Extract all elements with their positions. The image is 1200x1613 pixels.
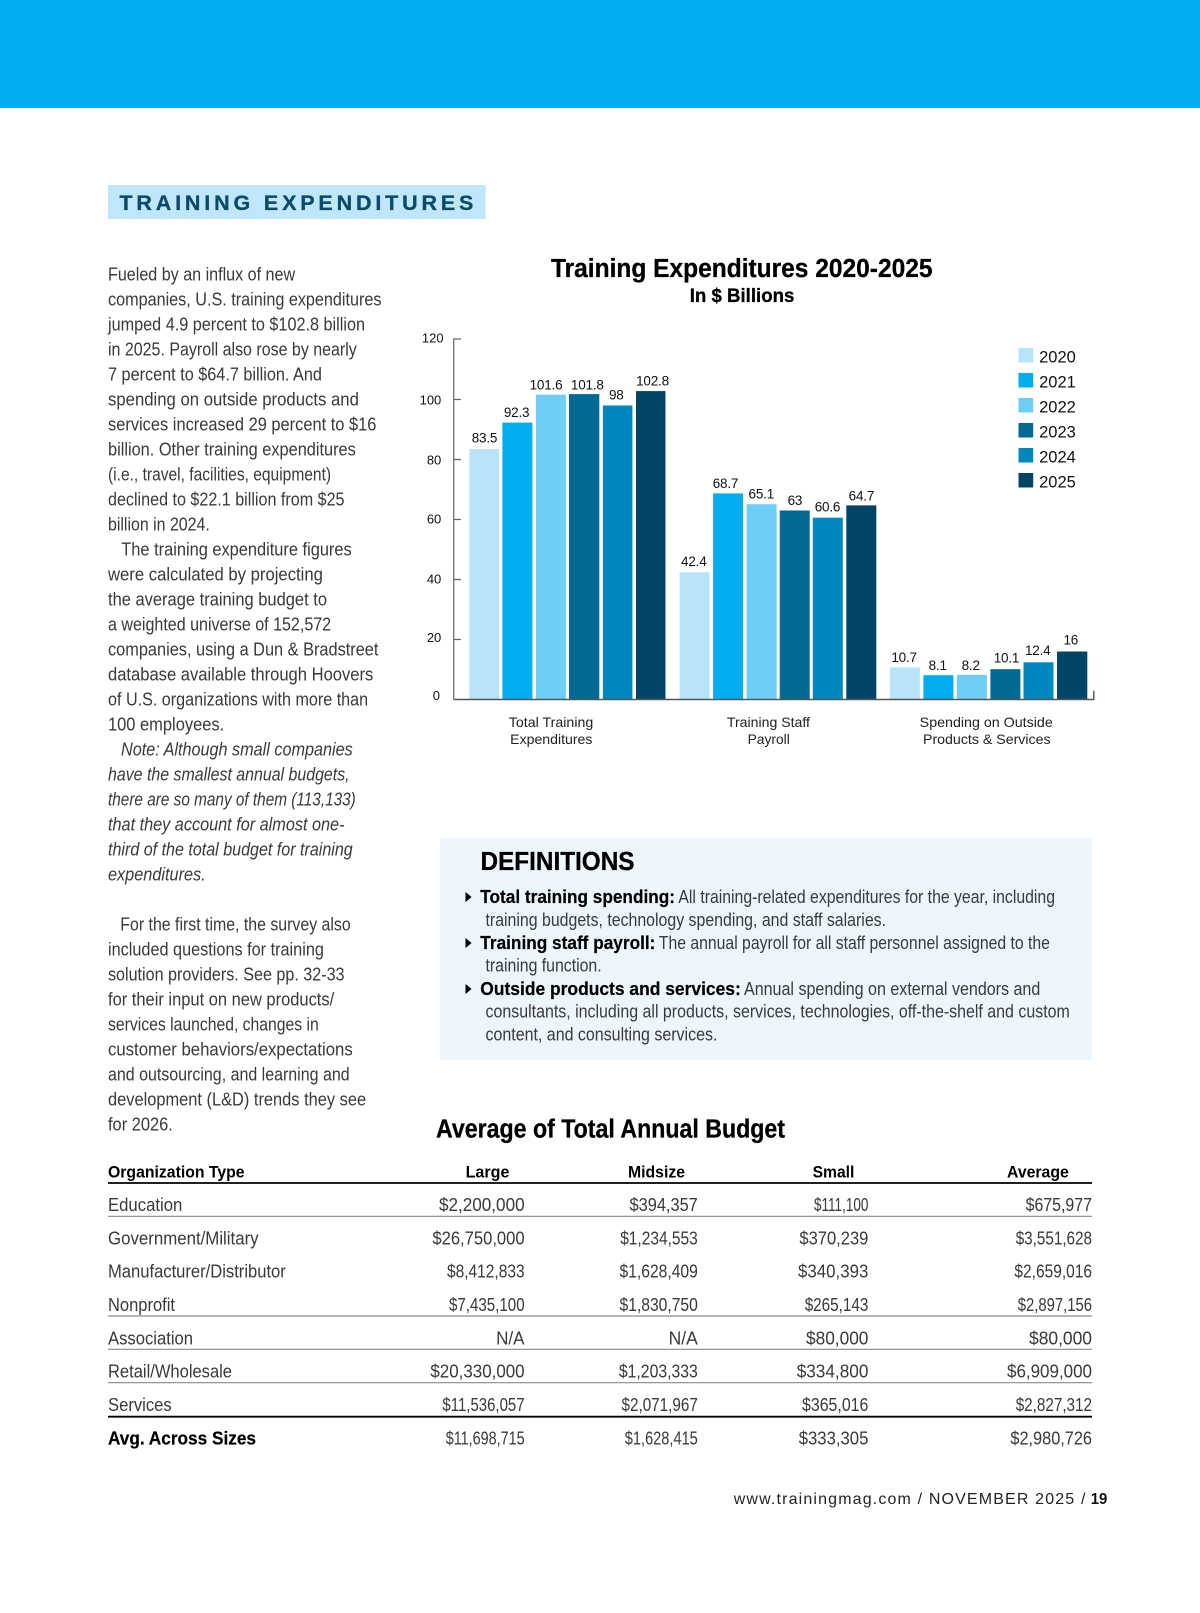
row: services <box>108 1394 1092 1415</box>
row: services: Services <box>108 1394 172 1415</box>
body text column: spending on outside products and <box>108 389 359 410</box>
row: manufacturer/distributor <box>108 1261 1092 1282</box>
table header: Average <box>1007 1163 1069 1182</box>
body text column: in 2025. Payroll also rose by nearly <box>108 339 357 360</box>
row: retail/wholesale: Retail/Wholesale <box>108 1361 232 1382</box>
table rules <box>108 1183 1092 1417</box>
footer: www.trainingmag.com / NOVEMBER 2025 / <box>733 1491 1086 1508</box>
category labels: Training Staff <box>727 714 810 730</box>
table header: Small <box>813 1163 854 1182</box>
category labels: Payroll <box>748 731 790 747</box>
data labels: 10.1 <box>994 650 1019 665</box>
body text column: companies, U.S. training expenditures <box>108 289 382 310</box>
y axis with ticks: 0 <box>433 688 440 703</box>
body text column: of U.S. organizations with more than <box>108 689 368 710</box>
data labels: 98 <box>609 388 624 402</box>
row: services: $2,827,312 <box>1016 1394 1092 1415</box>
data labels: 102.8 <box>636 374 669 389</box>
row: manufacturer/distributor: Manufacturer/Distributor <box>108 1261 286 1282</box>
category labels <box>509 714 1053 747</box>
body text column: development (L&D) trends they see <box>108 1089 366 1110</box>
legend <box>1018 348 1076 492</box>
row: manufacturer/distributor: $2,659,016 <box>1014 1261 1092 1282</box>
row: retail/wholesale: $334,800 <box>797 1361 868 1382</box>
body text column: (i.e., travel, facilities, equipment) <box>108 464 331 485</box>
data labels: 8.1 <box>929 658 947 673</box>
row: government/military: $370,239 <box>799 1227 868 1248</box>
body text column: billion. Other training expenditures <box>108 439 356 460</box>
row: nonprofit: $7,435,100 <box>449 1294 525 1315</box>
row: association: N/A <box>496 1327 525 1348</box>
row: education: $111,100 <box>814 1194 868 1215</box>
y axis with ticks <box>420 330 461 703</box>
y axis with ticks: 40 <box>427 572 441 587</box>
legend: 2025 <box>1039 473 1076 492</box>
chart title: Training Expenditures 2020-2025 <box>551 255 932 283</box>
legend: 2022 <box>1039 398 1076 417</box>
body text column: the average training budget to <box>108 589 327 610</box>
row: retail/wholesale: $20,330,000 <box>430 1361 525 1382</box>
row: services: $2,071,967 <box>622 1394 698 1415</box>
data labels: 12.4 <box>1025 643 1051 658</box>
body text column: Note: Although small companies <box>121 739 353 760</box>
table header <box>108 1163 1069 1182</box>
row: nonprofit: Nonprofit <box>108 1294 175 1315</box>
body text column: included questions for training <box>108 939 324 960</box>
data labels: 92.3 <box>504 405 529 420</box>
definition: total training spending: Total training spending: <box>480 886 675 907</box>
row: education: $2,200,000 <box>439 1194 525 1215</box>
row: government/military: Government/Military <box>108 1227 259 1248</box>
data labels: 65.1 <box>749 487 774 502</box>
data labels: 16 <box>1063 632 1078 647</box>
definition: outside products and services: content, and consulting services. <box>486 1023 717 1044</box>
data labels: 101.6 <box>530 377 562 392</box>
row: government/military: $26,750,000 <box>432 1227 525 1248</box>
y axis with ticks: 100 <box>420 392 441 408</box>
table header: Large <box>466 1163 509 1182</box>
body text column: a weighted universe of 152,572 <box>108 614 331 635</box>
definition: total training spending: All training-related expenditures for the year, including <box>678 886 1055 907</box>
body text column: database available through Hoovers <box>108 664 373 685</box>
body text column: third of the total budget for training <box>108 839 353 860</box>
row: manufacturer/distributor: $340,393 <box>798 1261 868 1282</box>
row: government/military <box>108 1227 1092 1248</box>
body text column: services increased 29 percent to $16 <box>108 414 376 435</box>
definitions heading: DEFINITIONS <box>480 848 634 876</box>
data labels: 8.2 <box>962 658 980 673</box>
body text column: for 2026. <box>108 1114 173 1135</box>
y axis with ticks: 20 <box>427 630 441 645</box>
definition: training staff payroll: The annual payroll for all staff personnel assigned to the <box>659 932 1050 953</box>
row: retail/wholesale: $1,203,333 <box>619 1361 698 1382</box>
table header: Organization Type <box>108 1163 245 1182</box>
row: nonprofit: $1,830,750 <box>620 1294 698 1315</box>
row: education: $394,357 <box>630 1194 698 1215</box>
body text column: expenditures. <box>108 864 206 885</box>
y axis with ticks: 120 <box>422 330 444 345</box>
data labels: 64.7 <box>849 488 874 503</box>
legend: 2021 <box>1039 373 1076 392</box>
definition: outside products and services <box>466 978 1070 1044</box>
definition: total training spending: training budgets, technology spending, and staff salaries. <box>486 909 886 930</box>
table header: Midsize <box>628 1163 685 1182</box>
row: government/military: $3,551,628 <box>1016 1227 1092 1248</box>
top banner <box>0 0 1200 108</box>
data labels: 42.4 <box>681 554 707 569</box>
body text column: for their input on new products/ <box>108 989 335 1010</box>
row: nonprofit: $265,143 <box>805 1294 868 1315</box>
body text column: customer behaviors/expectations <box>108 1039 353 1060</box>
row: average across sizes: Avg. Across Sizes <box>108 1427 256 1448</box>
row: education <box>108 1194 1092 1215</box>
body text column: have the smallest annual budgets, <box>108 764 350 785</box>
body text column: jumped 4.9 percent to $102.8 billion <box>107 314 365 335</box>
y axis with ticks: 80 <box>427 452 441 468</box>
definition: outside products and services: Annual spending on external vendors and <box>744 978 1040 999</box>
row: nonprofit <box>108 1294 1092 1315</box>
row: retail/wholesale: $6,909,000 <box>1007 1361 1092 1382</box>
bars: training staff payroll <box>680 493 876 700</box>
row: average across sizes: $11,698,715 <box>446 1427 525 1448</box>
y axis with ticks: 60 <box>427 512 441 527</box>
category labels: Total Training <box>509 714 593 730</box>
category labels: Spending on Outside <box>920 714 1053 730</box>
body text column: 7 percent to $64.7 billion. And <box>108 364 322 385</box>
category labels: Expenditures <box>510 731 592 747</box>
body text column: declined to $22.1 billion from $25 <box>108 489 344 510</box>
body text column: billion in 2024. <box>108 514 210 535</box>
row: average across sizes: $333,305 <box>799 1427 868 1448</box>
body text column: The training expenditure figures <box>121 539 352 560</box>
row: nonprofit: $2,897,156 <box>1018 1294 1092 1315</box>
data labels: 83.5 <box>472 431 497 446</box>
body text column: that they account for almost one- <box>108 814 344 835</box>
row: education: Education <box>108 1194 182 1215</box>
row: average across sizes <box>108 1427 1092 1448</box>
body text column: solution providers. See pp. 32-33 <box>108 964 344 985</box>
body text column: services launched, changes in <box>108 1014 319 1035</box>
row: government/military: $1,234,553 <box>620 1227 698 1248</box>
definition: training staff payroll: training function. <box>486 955 602 976</box>
row: services: $365,016 <box>802 1394 868 1415</box>
row: association: N/A <box>669 1327 698 1348</box>
row: association: Association <box>108 1327 193 1348</box>
body text column: For the first time, the survey also <box>120 914 351 935</box>
definition: training staff payroll <box>466 932 1050 976</box>
legend: 2020 <box>1039 348 1076 367</box>
row: manufacturer/distributor: $8,412,833 <box>447 1261 525 1282</box>
table row rules <box>108 1216 1092 1383</box>
definition: outside products and services: Outside products and services: <box>480 978 741 999</box>
row: association: $80,000 <box>1029 1327 1092 1348</box>
data labels <box>472 374 1078 673</box>
row: retail/wholesale <box>108 1361 1092 1382</box>
body text column: were calculated by projecting <box>107 564 323 585</box>
body text column: Fueled by an influx of new <box>108 264 296 285</box>
row: association: $80,000 <box>806 1327 868 1348</box>
data labels: 60.6 <box>815 499 840 514</box>
bar chart: training expenditures <box>420 330 1094 747</box>
x axis line <box>454 691 1094 700</box>
definition: training staff payroll: Training staff payroll: <box>480 932 655 953</box>
footer: 19 <box>1091 1491 1107 1508</box>
row: manufacturer/distributor: $1,628,409 <box>620 1261 698 1282</box>
body text column: companies, using a Dun & Bradstreet <box>108 639 379 660</box>
data labels: 63 <box>788 493 802 508</box>
row: services: $11,536,057 <box>442 1394 525 1415</box>
data labels: 68.7 <box>713 476 738 491</box>
row: education: $675,977 <box>1026 1194 1092 1215</box>
bars: total training expenditures <box>469 391 666 700</box>
definition: total training spending <box>466 886 1055 930</box>
row: average across sizes: $1,628,415 <box>625 1427 698 1448</box>
category labels: Products & Services <box>923 731 1051 747</box>
row: association <box>108 1327 1092 1348</box>
section heading: training expenditures <box>108 185 486 219</box>
row: average across sizes: $2,980,726 <box>1010 1427 1092 1448</box>
legend: 2024 <box>1039 448 1076 467</box>
data labels: 101.8 <box>571 377 604 392</box>
body text column <box>107 264 382 1135</box>
table title: Average of Total Annual Budget <box>436 1116 785 1144</box>
panel: definitions <box>440 838 1092 1060</box>
section heading: training expenditures: TRAINING EXPENDITURES <box>119 191 473 215</box>
legend: 2023 <box>1039 423 1076 442</box>
chart subtitle: In $ Billions <box>690 285 795 307</box>
body text column: 100 employees. <box>108 714 224 735</box>
data labels: 10.7 <box>891 650 917 665</box>
definition: outside products and services: consultants, including all products, services, technologies, off-the-shelf and custom <box>486 1001 1070 1022</box>
body text column: and outsourcing, and learning and <box>108 1064 350 1085</box>
bars: spending on outside products and services <box>890 652 1087 700</box>
body text column: there are so many of them (113,133) <box>108 789 356 810</box>
table: average total annual budget <box>108 1163 1092 1448</box>
